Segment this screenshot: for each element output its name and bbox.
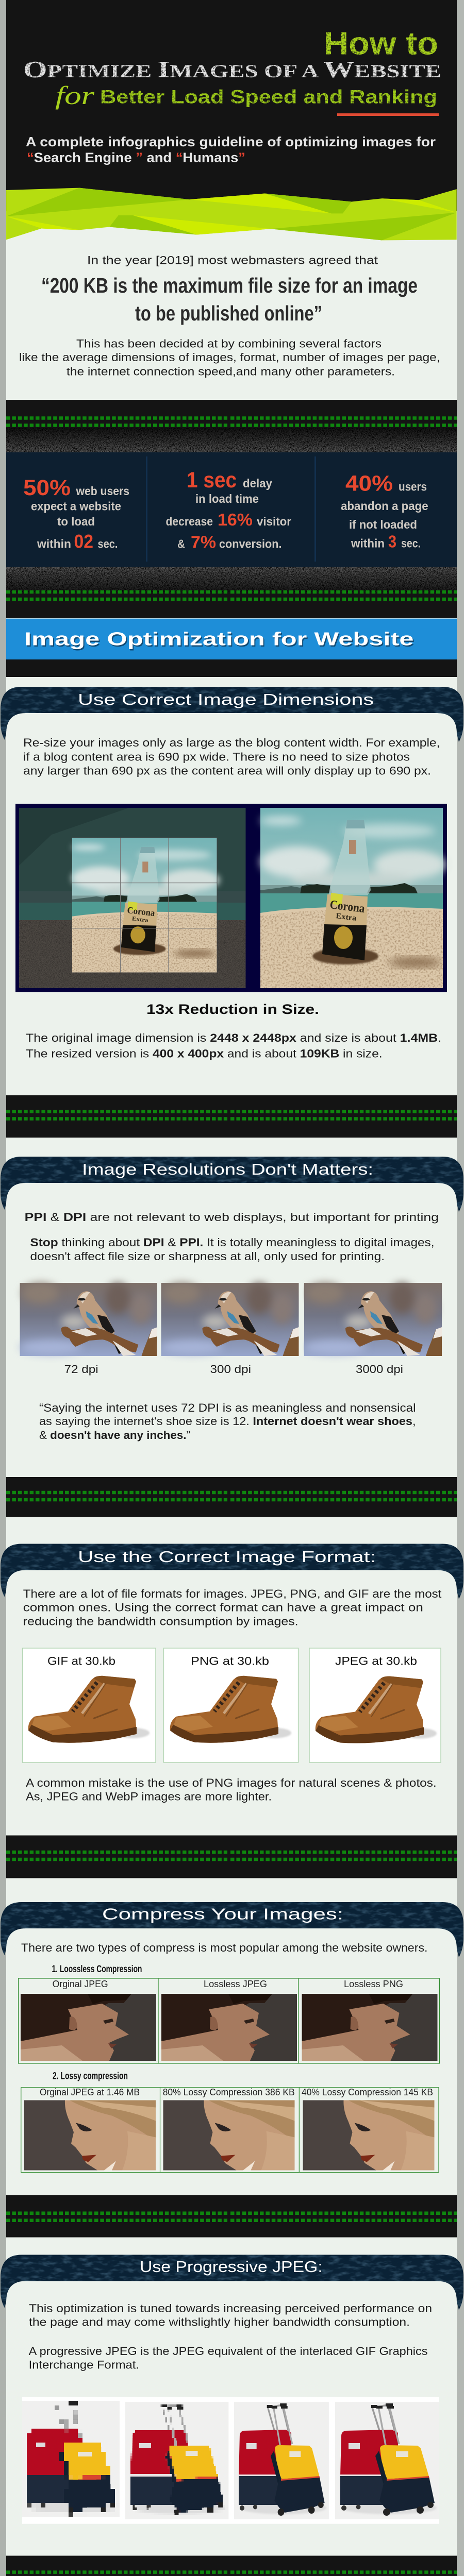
- stat: 50 percent: 50%: [23, 476, 71, 500]
- blue banner: Image Optimization for Website: Image Optimization for Website: [25, 630, 415, 651]
- stat: 40 percent: if not loaded: [349, 518, 417, 531]
- photo: resized: [260, 808, 446, 988]
- text: resize guidance: [23, 736, 440, 777]
- card: JPEG: JPEG at 30.kb: [335, 1655, 417, 1668]
- stat: 1 sec: decrease: [166, 515, 213, 528]
- heading banner: Compress Your Images: [1, 1902, 463, 1957]
- table: lossy compression: [21, 2087, 439, 2172]
- top green polygons: [6, 188, 457, 240]
- text: progressive JPEG: [29, 2302, 432, 2371]
- heading banner: Image Resolutions: [1, 1157, 463, 1212]
- photos: birds at 72, 300 and 3000 dpi: [20, 1283, 442, 1376]
- title: [23, 26, 441, 110]
- stat: 50 percent: sec.: [98, 537, 118, 551]
- heading: 13x reduction: 13x Reduction in Size.: [146, 1002, 319, 1017]
- stat: 1 sec: in load time: [195, 492, 259, 505]
- stat: 1 sec: 1 sec: [187, 468, 237, 493]
- text: PPI and DPI: [25, 1211, 439, 1263]
- text: size comparison: The resized version is 400 x 400px and is about 109KB in size.: [26, 1047, 383, 1060]
- text: common mistake: As, JPEG and WebP images are more lighter.: [26, 1790, 272, 1803]
- text: PPI and DPI: doesn't affect file size or sharpness at all, only used for printing.: [30, 1250, 385, 1263]
- subtitle: [26, 134, 436, 165]
- text: resize guidance: any larger than 690 px as the content area will only display up to 690 px.: [23, 765, 431, 777]
- stat: 1 sec: visitor: [257, 515, 291, 528]
- text: size comparison: The original image dimension is 2448 x 2448px and size is about 1.4MB .: [26, 1031, 441, 1044]
- heading banner: Use Correct Image Dimensions: Use Correct Image Dimensions: [78, 690, 374, 708]
- text: size comparison: [26, 1031, 441, 1060]
- heading: lossless compression: 1. Loossless Compression: [52, 1964, 142, 1975]
- table: lossy compression: Orginal JPEG at 1.46 MB: [40, 2087, 140, 2097]
- card: PNG: PNG at 30.kb: [191, 1655, 269, 1668]
- stat: 50 percent: 02: [74, 531, 93, 552]
- table: lossless compression: [19, 1978, 439, 2063]
- stat: 40 percent: sec.: [401, 537, 421, 550]
- title line: Optimize Images of a Website: O PTIMIZE IMAGES OF A W EBSITE: [23, 56, 441, 82]
- stat: 1 sec: [166, 468, 291, 552]
- title line: How to: How to: [324, 26, 438, 61]
- intro text block: In the year [2019] most webmasters agreed that: [87, 253, 378, 267]
- quote: as saying the internet's shoe size is 12. Internet doesn't wear shoes ,: [39, 1415, 416, 1428]
- stat: 1 sec: delay: [243, 477, 272, 490]
- text: PPI and DPI: Stop thinking about DPI & PPI. It is totally meaningless to digital images,: [30, 1236, 434, 1249]
- blue banner: Image Optimization for Website: [6, 619, 457, 677]
- heading banner: Compress Your Images: Compress Your Images:: [102, 1905, 343, 1923]
- stat: 50 percent: expect a website: [31, 500, 121, 513]
- title line: Better Load Speed and Ranking: Better Load Speed and Ranking: [100, 87, 437, 108]
- intro text block: like the average dimensions of images, format, number of images per page,: [19, 351, 440, 364]
- intro text block: [19, 253, 440, 378]
- stat: 40 percent: abandon a page: [341, 499, 428, 513]
- text: progressive JPEG: the page and may come withslightly higher bandwidth consumption.: [29, 2315, 410, 2329]
- text: progressive JPEG: Interchange Format.: [29, 2358, 139, 2371]
- red underline: [337, 113, 439, 116]
- text: file formats: [23, 1587, 441, 1628]
- heading banner: Use Progressive JPEG: Use Progressive JPEG:: [140, 2258, 323, 2276]
- quote: & doesn't have any inches.”: [39, 1429, 190, 1442]
- text: file formats: common ones. Using the correct format can have a great impact on: [23, 1601, 423, 1614]
- stat: 40 percent: users: [399, 480, 427, 493]
- stat: 1 sec: 16%: [218, 510, 253, 529]
- key statement: [41, 274, 418, 325]
- stat: 1 sec: &: [177, 537, 185, 551]
- title line: for: for: [55, 81, 95, 110]
- table: lossless compression: Orginal JPEG: [53, 1979, 108, 1989]
- photo: crop overlay: [19, 808, 245, 988]
- text: common mistake: A common mistake is the use of PNG images for natural scenes & photos.: [26, 1776, 437, 1789]
- blue banner: Image Optimization for Website: Image Optimization for Website: [24, 629, 413, 650]
- text: resize guidance: if a blog content area is 690 px wide. There is no need to size photos: [23, 751, 410, 764]
- photo comparison: cropped and resized bottle: [15, 804, 447, 992]
- stat: 40 percent: 40%: [345, 471, 393, 496]
- table: lossless compression: Lossless PNG: [344, 1979, 403, 1989]
- table: lossless compression: Lossless JPEG: [204, 1979, 267, 1989]
- heading: lossy compression: 2. Lossy compression: [53, 2071, 128, 2081]
- heading banner: Use Correct Image Dimensions: [1, 687, 463, 742]
- table: lossy compression: 80% Lossy Compression 386 KB: [163, 2087, 295, 2097]
- table: lossy compression: 40% Lossy Compression 145 KB: [302, 2087, 433, 2097]
- stat: 50 percent: to load: [57, 515, 95, 528]
- text: file formats: reducing the bandwidth consumption by images.: [23, 1615, 299, 1628]
- text: progressive JPEG: This optimization is tuned towards increasing perceived performance on: [29, 2302, 432, 2315]
- dpi captions: 72 dpi: [64, 1363, 98, 1376]
- subtitle: “Search Engine ” and “Humans”: [27, 149, 245, 165]
- stat: 1 sec: 7%: [191, 533, 216, 552]
- text: file formats: There are a lot of file formats for images. JPEG, PNG, and GIF are the most: [23, 1587, 441, 1600]
- stat: 40 percent: [341, 471, 428, 551]
- card: GIF: [23, 1648, 156, 1762]
- text: PPI and DPI: PPI & DPI are not relevant to web displays, but important for printing: [25, 1211, 439, 1224]
- card: PNG: [163, 1648, 299, 1762]
- heading banner: Use Progressive JPEG: [1, 2255, 463, 2310]
- quote: [39, 1401, 416, 1442]
- stat: 50 percent: [23, 476, 129, 552]
- text: compression intro: There are two types of compress is most popular among the website owners.: [21, 1941, 428, 1954]
- stat: 50 percent: within: [37, 537, 71, 551]
- stat: 1 sec: conversion.: [219, 537, 281, 551]
- intro text block: the internet connection speed,and many other parameters.: [67, 365, 395, 378]
- boot comparison: [23, 1648, 441, 1762]
- heading banner: Use the Correct Image Format: Use the Correct Image Format:: [78, 1548, 376, 1566]
- subtitle: A complete infographics guideline of optimizing images for: [26, 134, 436, 149]
- text: progressive JPEG: A progressive JPEG is the JPEG equivalent of the interlaced GIF Graphics: [29, 2345, 428, 2358]
- panel: statistics: [6, 452, 457, 567]
- dpi captions: 3000 dpi: [356, 1363, 403, 1376]
- dpi captions: [64, 1363, 403, 1376]
- heading banner: Image Resolutions: Image Resolutions Don't Matters:: [82, 1160, 373, 1178]
- dpi captions: 300 dpi: [210, 1363, 251, 1376]
- text: common mistake: [26, 1776, 437, 1803]
- text: resize guidance: Re-size your images only as large as the blog content width. For example,: [23, 736, 440, 749]
- stat: 40 percent: 3: [388, 532, 396, 551]
- stat: 50 percent: web users: [76, 484, 129, 498]
- heading banner: Use the Correct Image Format: [1, 1544, 463, 1599]
- card: JPEG: [309, 1648, 441, 1762]
- quote: “Saying the internet uses 72 DPI is as meaningless and nonsensical: [39, 1401, 416, 1414]
- intro text block: This has been decided at by combining several factors: [76, 337, 382, 350]
- photos: progressive luggage: [22, 2397, 439, 2524]
- card: GIF: GIF at 30.kb: [47, 1655, 115, 1668]
- key statement: to be published online”: [135, 301, 322, 325]
- stat: 40 percent: within: [351, 537, 385, 550]
